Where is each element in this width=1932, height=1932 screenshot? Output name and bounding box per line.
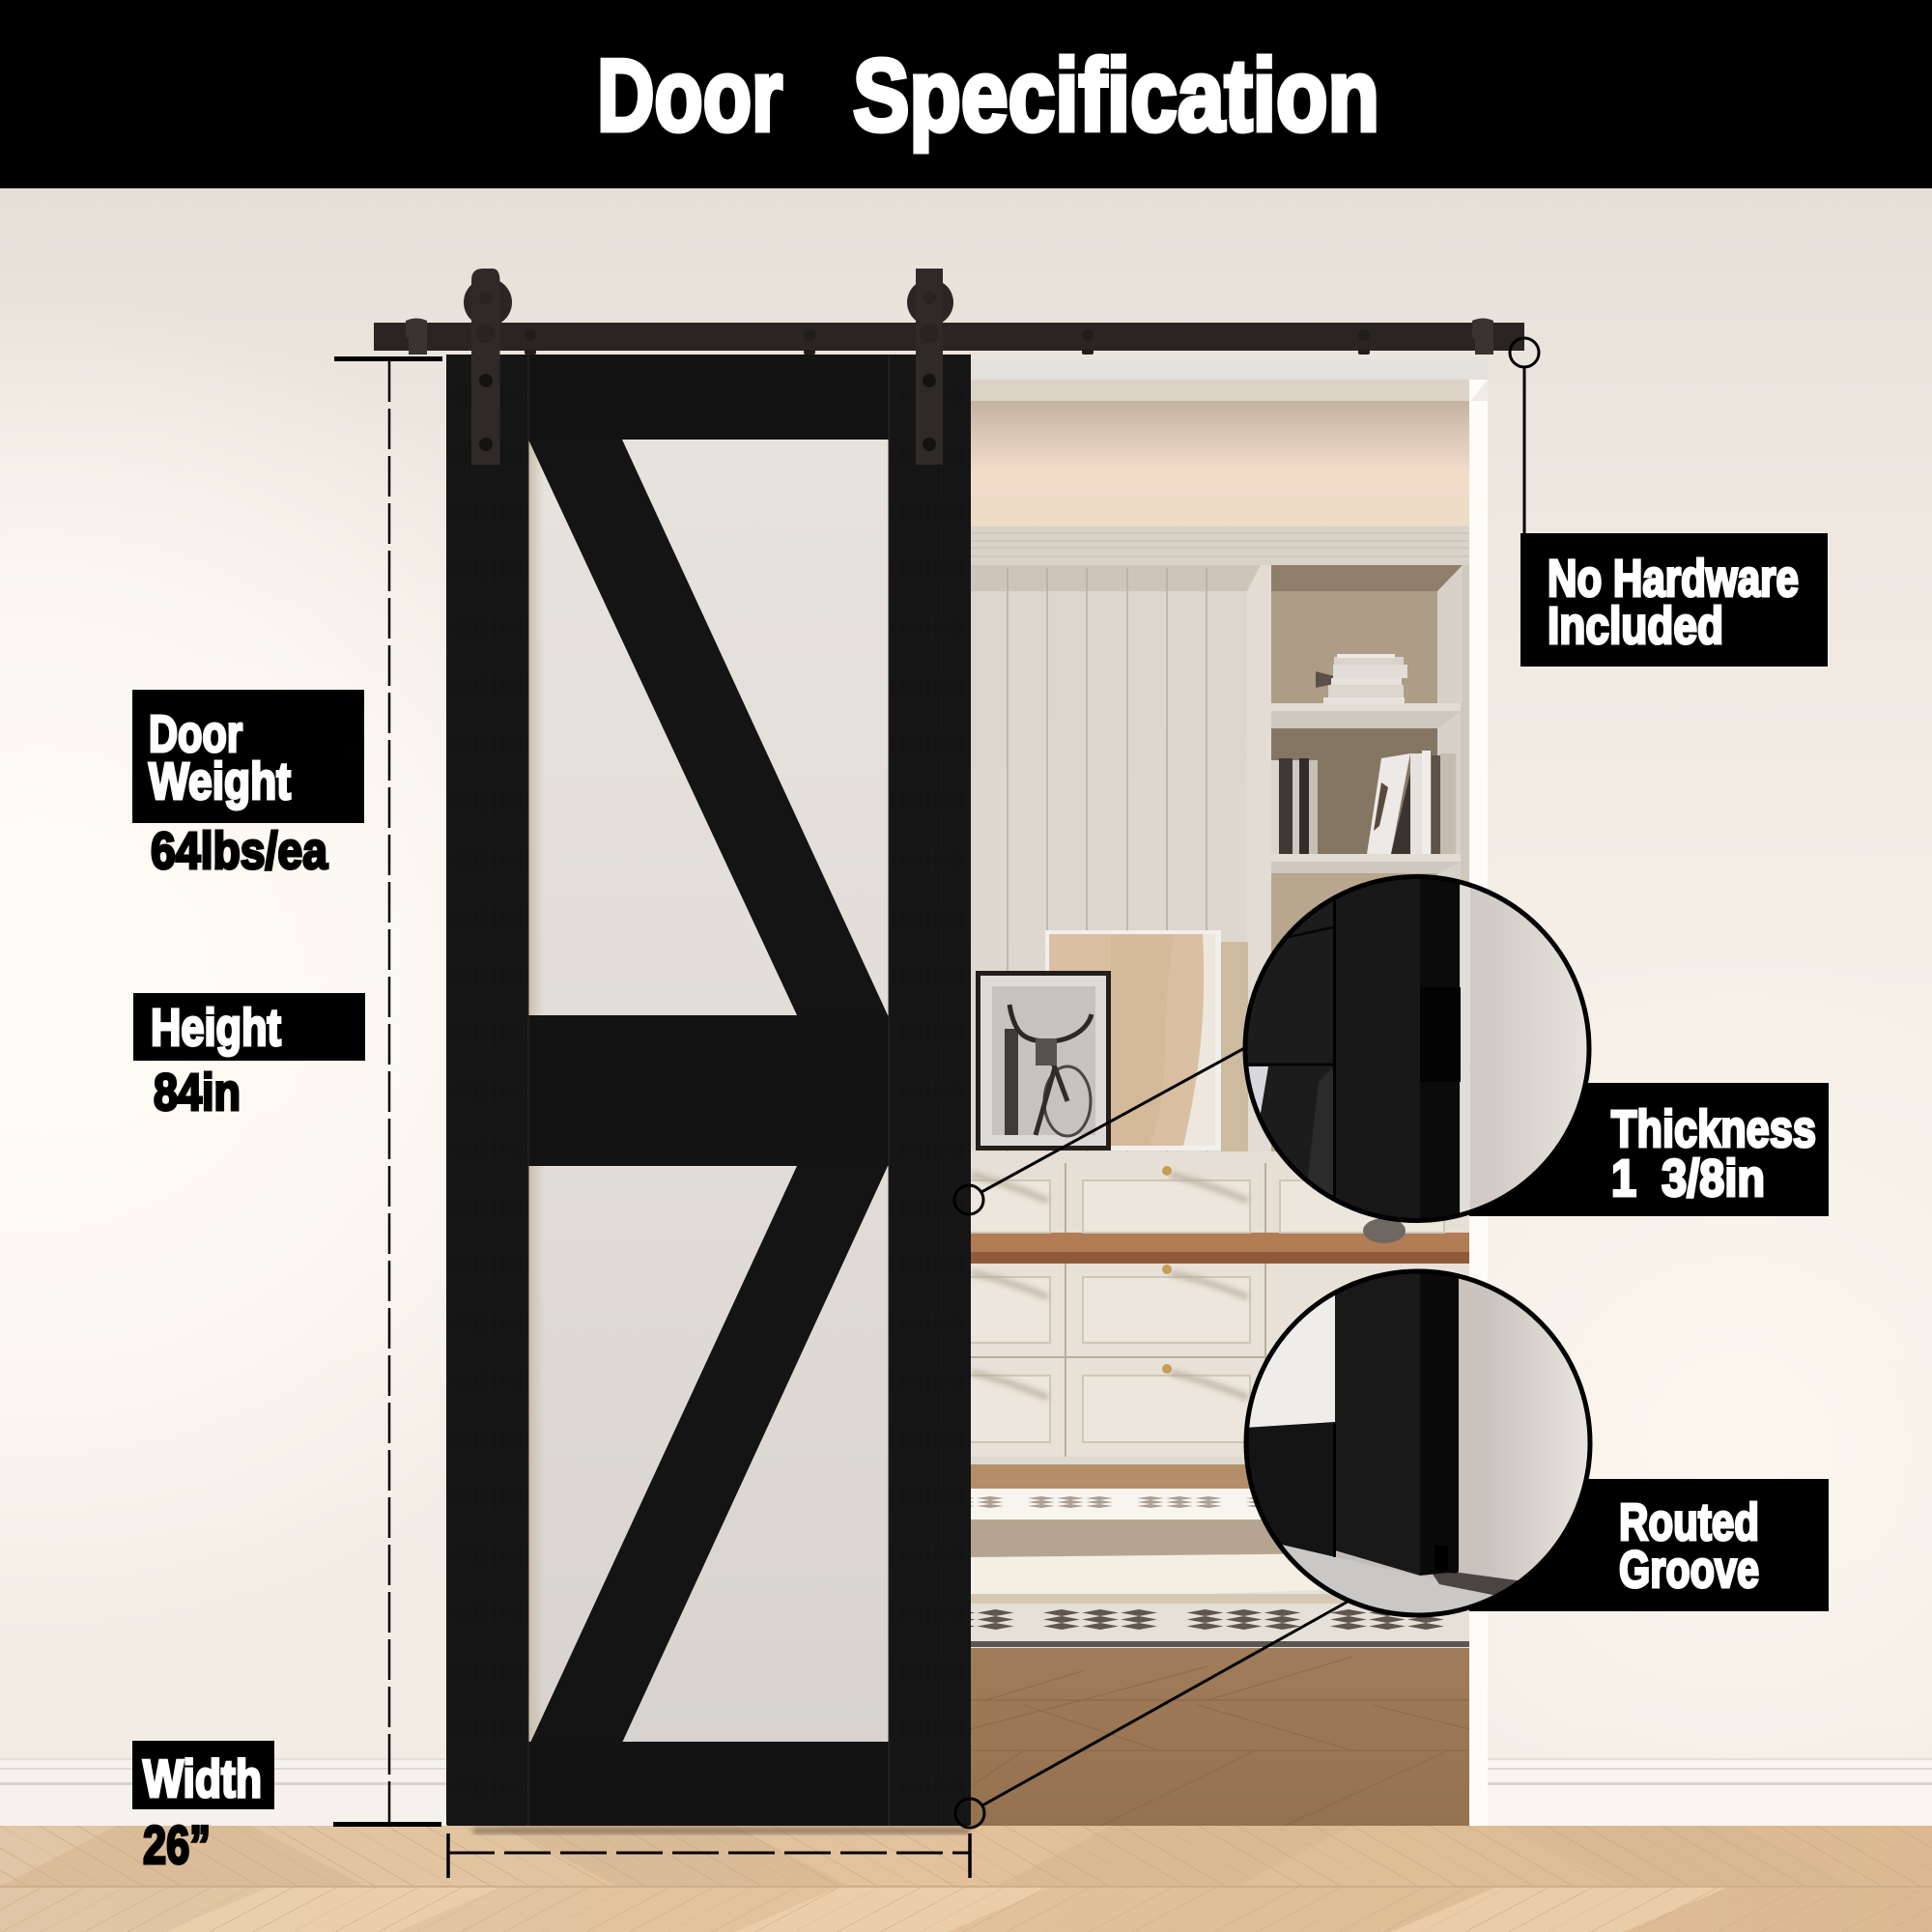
label: thickness box: [1469, 1083, 1829, 1216]
door frame casing right: [1469, 380, 1488, 1826]
baseboard left: [0, 1758, 454, 1826]
label: no hardware included: Included: [1548, 597, 1723, 655]
lower diagonal brace: [530, 1166, 888, 1743]
soffit: [970, 380, 1470, 401]
watercolour print: [1045, 930, 1248, 1151]
bookcase: [1247, 565, 1470, 1154]
label: no hardware included: No Hardware: [1548, 550, 1799, 608]
bicycle photo print: [976, 971, 1111, 1151]
door top rail: [446, 355, 971, 440]
left stile: [446, 355, 528, 1826]
floor: chevron parquet: [0, 1826, 1932, 1932]
text: routed groove: Routed: [1619, 1493, 1759, 1551]
track end marker and leader: [1510, 338, 1539, 533]
right stile: [889, 355, 971, 1826]
upright books: [1271, 751, 1456, 854]
baseboard right: [1488, 1758, 1932, 1826]
text: thickness: Thickness: [1611, 1100, 1816, 1158]
routed groove leader and marker: [955, 1602, 1348, 1828]
barn door: [446, 355, 971, 1826]
bottom rail: [528, 1742, 889, 1826]
label: width: Width: [143, 1748, 262, 1808]
sliding track with hangers: [374, 269, 1524, 465]
head casing: [970, 359, 1488, 381]
label: routed groove box: [1469, 1479, 1829, 1611]
hardwood behind rug: [970, 1464, 1470, 1490]
rug: [970, 1489, 1470, 1648]
text: thickness: 1 3/8in: [1611, 1150, 1765, 1208]
stile wood grain: [448, 357, 970, 1824]
width dimension line: [448, 1833, 970, 1878]
text: thickness: [1611, 1100, 1816, 1208]
track mount bolts: [525, 329, 1370, 355]
title bar: [0, 0, 1932, 188]
label: height: Height: [151, 999, 281, 1057]
left stopper: [406, 319, 427, 355]
middle rail: [528, 1015, 889, 1166]
label: door weight: Weight: [149, 753, 291, 810]
label: door weight: [132, 690, 364, 880]
thickness leader and marker: [954, 1046, 1248, 1214]
left hanger wheel and strap: [464, 269, 512, 465]
label: width: [132, 1741, 274, 1875]
stacked books: [1316, 654, 1407, 704]
hardwood foreground: [970, 1648, 1470, 1826]
label: height: 84in: [154, 1064, 241, 1122]
door leaf back panels: [528, 438, 889, 1744]
sideboard: [970, 1151, 1470, 1464]
right stopper: [1472, 319, 1493, 355]
track rail: [374, 323, 1524, 351]
crown moulding: [970, 526, 1470, 565]
upper diagonal brace: [528, 440, 888, 1015]
magnifier: routed groove: [1244, 1270, 1594, 1623]
panel edge shading: [528, 440, 544, 1744]
door shadow on floor: [473, 1828, 970, 1833]
label: door weight: 64lbs/ea: [151, 822, 328, 880]
ceiling glow: [970, 401, 1470, 528]
label: width: 26”: [143, 1814, 211, 1875]
text: routed groove: Groove: [1619, 1541, 1759, 1599]
height dimension line: [333, 359, 442, 1826]
magnifier: door thickness: [1244, 874, 1594, 1224]
doorway opening with interior room: [970, 359, 1488, 1826]
panelled wall: [970, 565, 1261, 1156]
label: height: [133, 993, 365, 1122]
label: no hardware included: [1520, 533, 1828, 667]
label: door weight: Door: [149, 705, 242, 763]
text: routed groove: [1619, 1493, 1759, 1599]
title bar: Specification: [853, 39, 1379, 153]
right hanger wheel and strap: [907, 269, 953, 465]
title bar: Door: [597, 39, 782, 153]
